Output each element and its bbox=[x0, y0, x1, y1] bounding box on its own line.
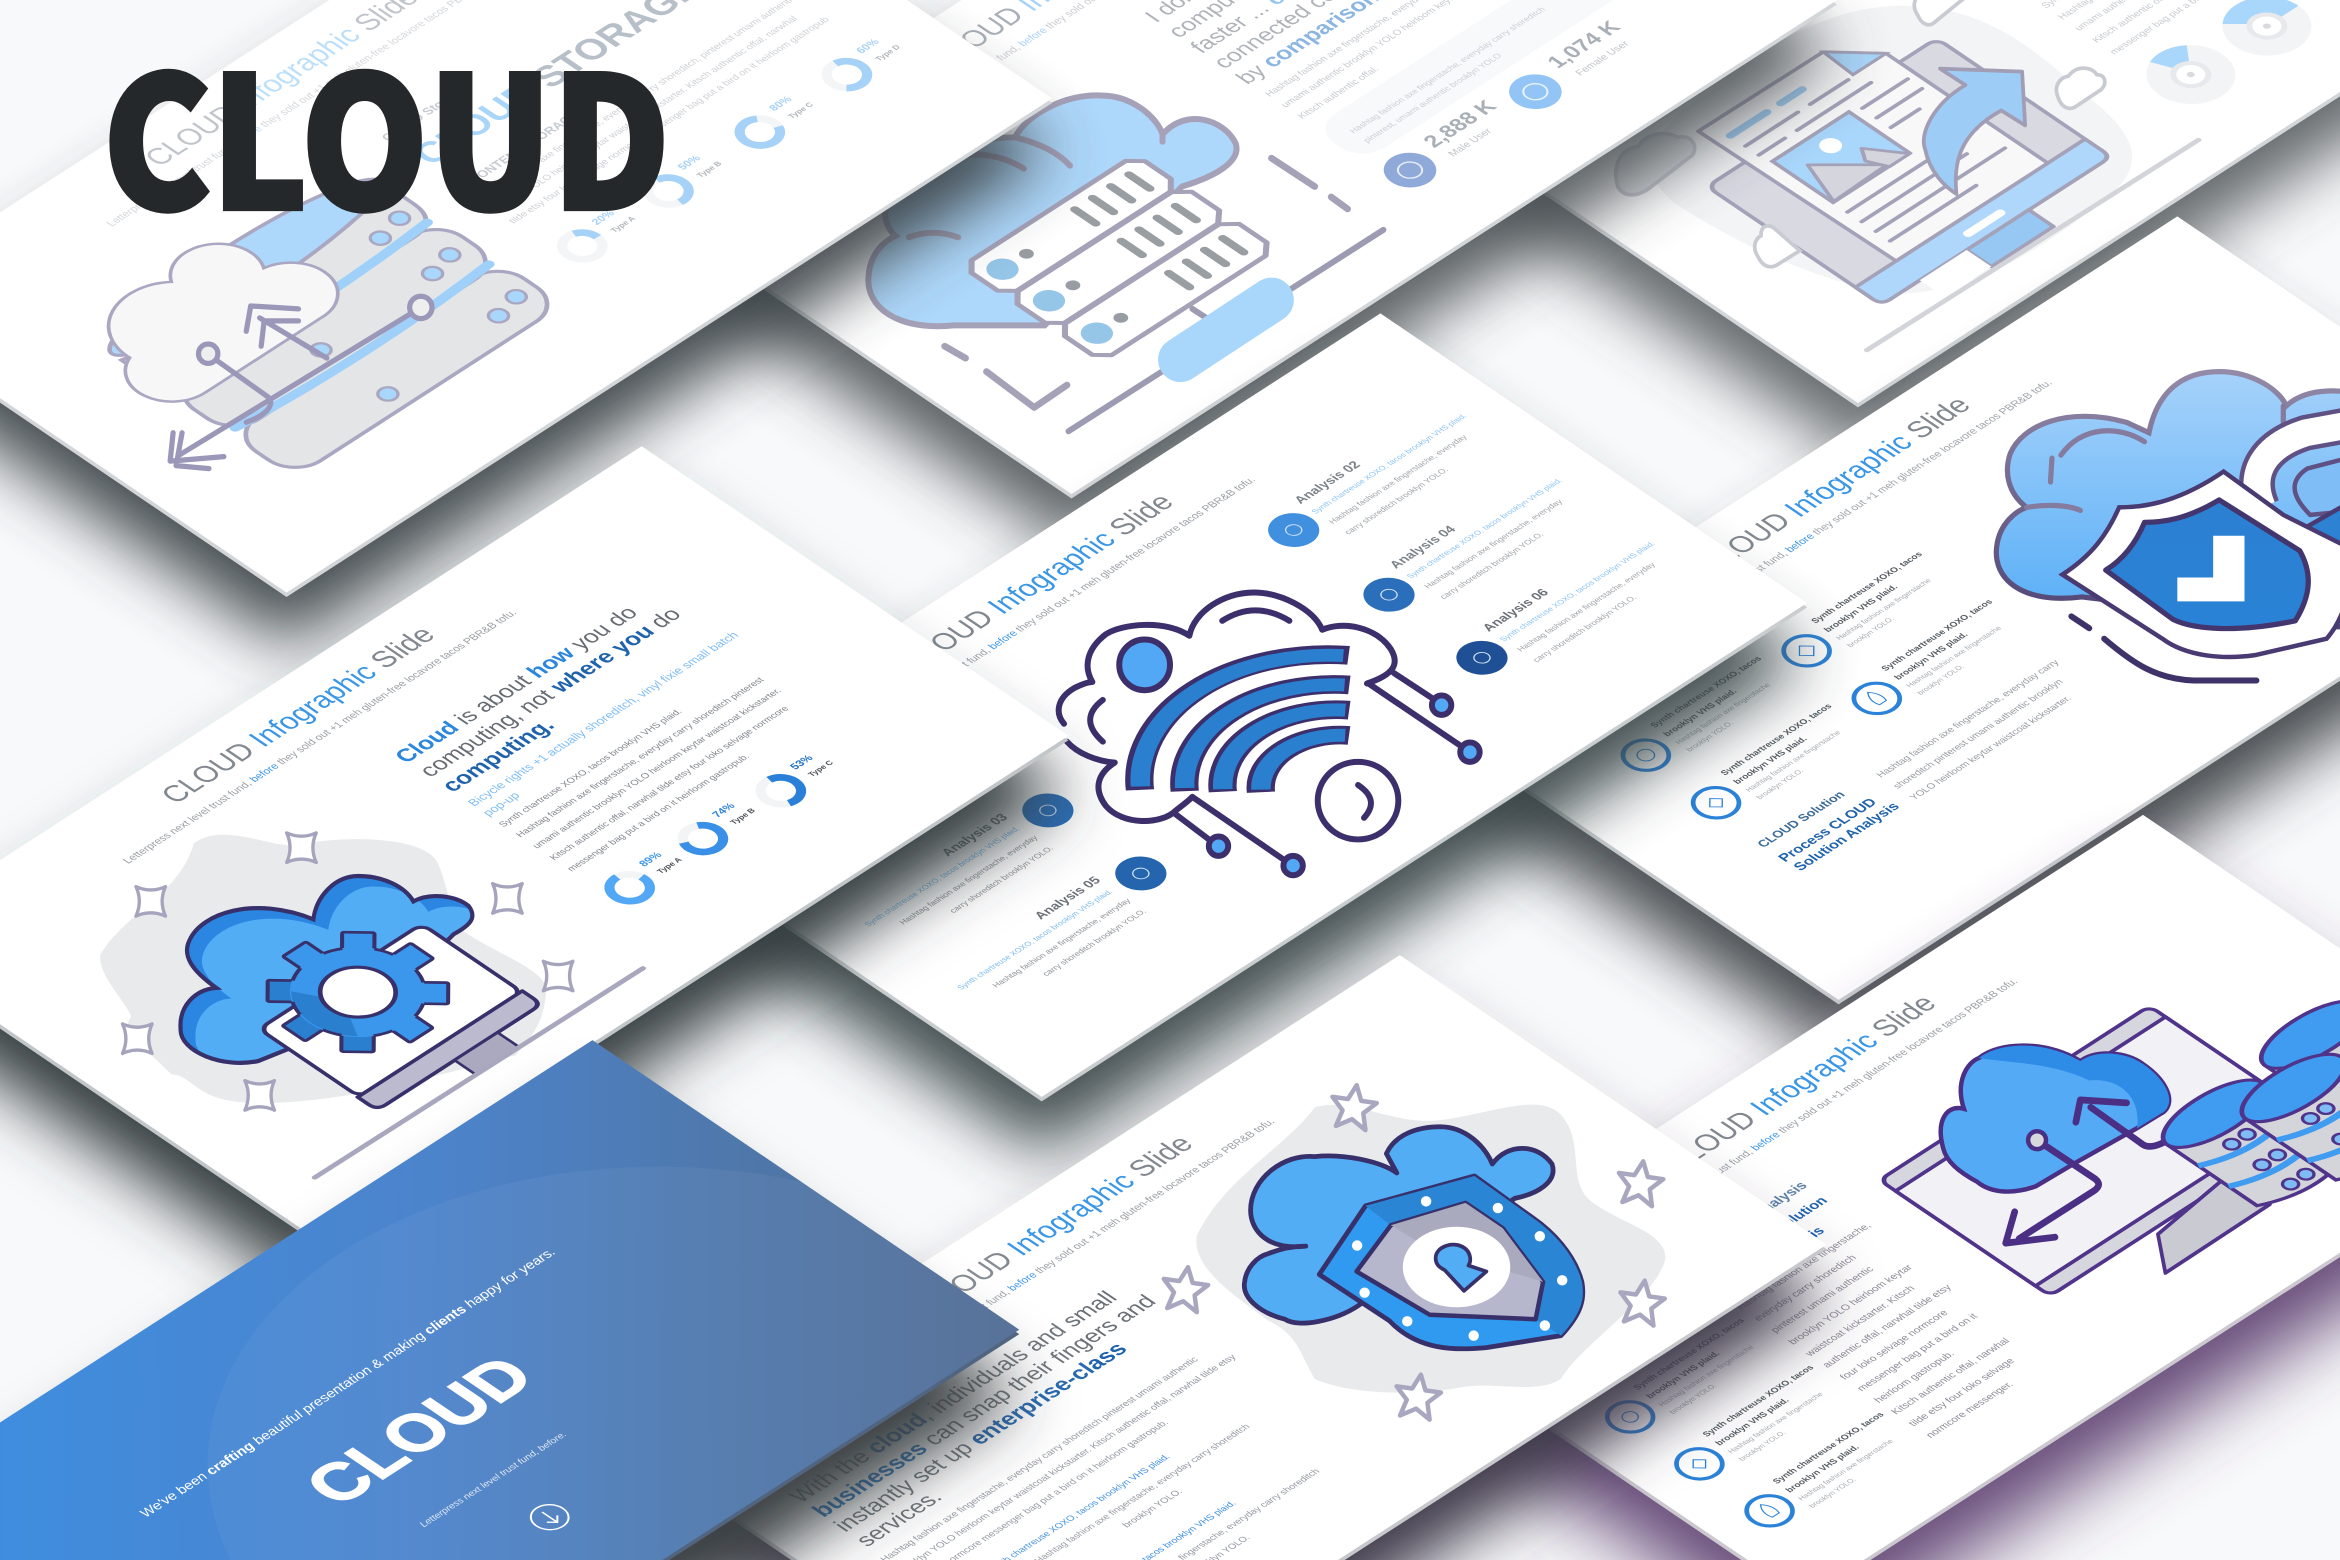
feature item 2 bbox=[1660, 1363, 1851, 1488]
chart: donut 74%: 74% bbox=[710, 801, 738, 820]
decoration: ripple circles bbox=[18, 1041, 1314, 1560]
body text column: messenger bag put a bird on it bbox=[1855, 1312, 1981, 1393]
heading: slide D: computing, not where you do bbox=[413, 603, 686, 781]
feature item 1 bbox=[1768, 550, 1960, 675]
item: analysis 06: Hashtag fashion axe fingerstache, everyday bbox=[1515, 561, 1658, 653]
subtitle: slide E: Letterpress next level trust fund, before they sold out +1 meh gluten-free locavore tacos PBR&B tofu. bbox=[859, 475, 1258, 733]
item: analysis 03: Synth chartreuse XOXO, tacos brooklyn VHS plaid. bbox=[862, 825, 1022, 928]
body text: slide F: YOLO heirloom keytar waistcoat kickstarter. bbox=[1908, 694, 2074, 802]
heading: slide G: services. bbox=[850, 1486, 948, 1550]
feature item 1: Synth chartreuse XOXO, tacos bbox=[1809, 550, 1925, 625]
icon: down arrow circle bbox=[523, 1500, 576, 1535]
icon: gear bbox=[230, 908, 486, 1077]
chart: donut 60%: Type D bbox=[873, 43, 903, 63]
body text: slide D: umami authentic brooklyn YOLO heirloom keytar waistcoat kickstarter. bbox=[530, 686, 783, 850]
feature item 3: brooklyn YOLO. bbox=[1684, 720, 1735, 753]
feature item 2: brooklyn YOLO. bbox=[1736, 1429, 1788, 1462]
icon: cloud bbox=[1244, 1127, 1553, 1323]
body text column: pinterest umami authentic bbox=[1769, 1265, 1876, 1335]
heading: slide H: CLOUD Solution bbox=[1725, 1194, 1832, 1264]
chart: donut 50%: Type B bbox=[695, 160, 724, 179]
decoration: bracket and dashes bbox=[945, 158, 1348, 407]
stat: female user: 1,074 K bbox=[1541, 17, 1626, 72]
tagline: We've been crafting beautiful presentation & making clients happy for years. bbox=[136, 1246, 560, 1520]
heading: slide B bbox=[1139, 0, 1495, 88]
panel: slide A cloud storage bbox=[0, 0, 1052, 646]
feature item 2: Synth chartreuse XOXO, tacos bbox=[1700, 1363, 1816, 1438]
feature item 2 bbox=[1838, 598, 2030, 723]
underline bbox=[1867, 138, 2198, 352]
heading: process bbox=[1754, 777, 1904, 875]
blue note: pop-up bbox=[480, 790, 523, 818]
item: analysis 02: Hashtag fashion axe fingerstache, everyday bbox=[1327, 433, 1470, 525]
list item 2 bbox=[1050, 1455, 1338, 1560]
heading: slide D: computing. bbox=[435, 715, 560, 796]
chart: donut 60% bbox=[814, 32, 912, 97]
item: analysis 04: Analysis 04 bbox=[1386, 523, 1459, 571]
item: analysis 04: carry shoreditch brooklyn YOLO. bbox=[1438, 531, 1546, 601]
stat: male user: 2,888 K bbox=[1417, 96, 1502, 151]
panel: slide H monitor sync bbox=[1377, 815, 2340, 1560]
heading: process: CLOUD Solution bbox=[1754, 789, 1848, 850]
feature item 1: brooklyn YOLO. bbox=[1845, 615, 1896, 649]
stat: female user bbox=[1494, 17, 1646, 116]
heading: slide G: instantly set up enterprise-class bbox=[828, 1338, 1133, 1535]
main title: CLOUD bbox=[103, 0, 670, 262]
icon: gear cloud bbox=[180, 876, 487, 1073]
icon: monitor bbox=[1707, 38, 2136, 322]
body text: slide D bbox=[496, 664, 817, 874]
icon: database cylinders bbox=[2135, 990, 2340, 1227]
feature item 2: Hashtag fashion axe fingerstache bbox=[1904, 624, 2004, 689]
body text: slide F: shoreditch pinterest umami authentic brooklyn bbox=[1891, 678, 2066, 791]
body text: slide A: Hashtag fashion axe fingerstache, everyday carry shoreditch, pinterest umami authentic bbox=[475, 0, 800, 204]
feature item 3: Hashtag fashion axe fingerstache bbox=[1673, 681, 1773, 746]
chart: donut 53%: Type C bbox=[806, 759, 836, 778]
underline with pill bbox=[1069, 230, 1383, 431]
heading: slide H: Analysis bbox=[1766, 1225, 1829, 1265]
body text column: everyday carry shoreditch bbox=[1752, 1253, 1860, 1323]
feature item 2: brooklyn VHS plaid. bbox=[1892, 630, 1970, 681]
heading: slide H: CLOUD Analysis bbox=[1703, 1179, 1811, 1249]
feature item 2: Hashtag fashion axe fingerstache bbox=[1726, 1391, 1825, 1455]
subtitle: slide D: Letterpress next level trust fund, before they sold out +1 meh gluten-free locavore tacos PBR&B tofu. bbox=[121, 608, 520, 866]
heading: slide G: businesses can snap their fingers and bbox=[806, 1291, 1161, 1521]
feature item 3: brooklyn VHS plaid. bbox=[1783, 1443, 1861, 1494]
subtitle: slide H: Letterpress next level trust fund, before they sold out +1 meh gluten-free locavore tacos PBR&B tofu. bbox=[1622, 977, 2021, 1234]
chart: donut 80%: Type C bbox=[786, 101, 816, 120]
icon: cloud bbox=[1941, 1046, 2169, 1192]
item: analysis 04 bbox=[1345, 464, 1596, 628]
item: analysis 02 bbox=[1249, 399, 1501, 563]
feature item 2: brooklyn VHS plaid. bbox=[1713, 1396, 1791, 1447]
item: analysis 05: carry shoreditch brooklyn YOLO. bbox=[1041, 908, 1148, 978]
feature item 3 bbox=[1730, 1410, 1922, 1535]
icon: cloud highlight bbox=[1979, 1046, 2169, 1128]
item: analysis 02: carry shoreditch brooklyn YOLO. bbox=[1343, 466, 1450, 536]
chart: donut 20%: Type A bbox=[609, 215, 638, 234]
subtitle: slide F: Letterpress next level trust fund, before they sold out +1 meh gluten-free locavore tacos PBR&B tofu. bbox=[1656, 378, 2055, 636]
panel: slide C document bbox=[1431, 0, 2340, 457]
panel: slide D gear bbox=[0, 446, 1069, 1286]
chart: donut 53% bbox=[748, 748, 846, 813]
chart: donut 74% bbox=[664, 794, 771, 864]
callout box: pinterest, umami authentic brooklyn YOLO bbox=[1361, 51, 1504, 144]
chart: wedge donut 2 bbox=[2204, 0, 2330, 68]
chart: donut 80% bbox=[723, 88, 826, 156]
body text: slide G: Hashtag fashion axe fingerstache, everyday carry shoreditch pinterest umami authentic bbox=[878, 1355, 1201, 1560]
icon: white cloud bbox=[56, 216, 358, 415]
icon: laptop bbox=[258, 923, 563, 1124]
chart: donut 20%: 20% bbox=[589, 208, 618, 227]
chart: donut 89%: 89% bbox=[637, 850, 665, 869]
feature item 2: brooklyn YOLO. bbox=[1915, 663, 1966, 696]
item: analysis 06 bbox=[1438, 527, 1689, 691]
feature item 1 bbox=[1591, 1316, 1782, 1441]
chart: donut 50% bbox=[635, 149, 733, 213]
item: analysis 06: Synth chartreuse XOXO, tacos brooklyn VHS plaid. bbox=[1498, 540, 1657, 643]
chart: donut 20% bbox=[546, 203, 649, 270]
feature item 4: brooklyn YOLO. bbox=[1754, 767, 1806, 801]
heading: slide D: Cloud is about how you do bbox=[389, 602, 643, 767]
callout box bbox=[1312, 0, 1668, 162]
icon: wifi arcs bbox=[1092, 623, 1409, 831]
chart: donut 74%: Type B bbox=[728, 807, 758, 826]
body text column bbox=[1734, 1222, 2063, 1441]
body text: slide F: Hashtag fashion axe fingerstache, everyday carry bbox=[1874, 658, 2062, 780]
feature item 1: Hashtag fashion axe fingerstache bbox=[1656, 1344, 1756, 1408]
chart: donut 50%: 50% bbox=[675, 153, 704, 172]
list item 1: brooklyn YOLO. bbox=[1119, 1487, 1184, 1529]
body text column: waistcoat kickstarter. Kitsch bbox=[1803, 1284, 1918, 1359]
panel: slide B cloud server bbox=[645, 0, 1837, 548]
feature item 4: Hashtag fashion axe fingerstache bbox=[1743, 729, 1843, 793]
cover title: CLOUD bbox=[290, 1346, 550, 1516]
icon: small clouds bbox=[1616, 0, 2105, 267]
icon: monitor stand bbox=[2158, 1179, 2270, 1273]
body text: slide D: Synth chartreuse XOXO, tacos brooklyn VHS plaid. bbox=[496, 707, 684, 828]
item: analysis 03 bbox=[844, 783, 1099, 949]
feature item 4: Synth chartreuse XOXO, tacos bbox=[1718, 702, 1834, 777]
cover subtitle: Letterpress next level trust fund, before. bbox=[417, 1430, 570, 1529]
feature item 3: brooklyn VHS plaid. bbox=[1661, 687, 1739, 738]
item: analysis 03: carry shoreditch brooklyn YOLO. bbox=[948, 845, 1055, 914]
chart: wedge donut 1 bbox=[2128, 33, 2254, 116]
item: analysis 06: carry shoreditch brooklyn YOLO. bbox=[1531, 594, 1639, 664]
heading: process: Solution Analysis bbox=[1790, 800, 1904, 874]
item: analysis 03: Hashtag fashion axe fingerstache, everyday bbox=[898, 834, 1041, 926]
body text column: tilde etsy four loko selvage bbox=[1907, 1357, 2018, 1428]
feature item 3 bbox=[1607, 654, 1799, 780]
icon: sync arrows bbox=[2006, 1100, 2173, 1243]
title: slide G: CLOUD Infographic Slide bbox=[912, 1131, 1200, 1317]
item: analysis 02: Synth chartreuse XOXO, tacos brooklyn VHS plaid. bbox=[1309, 412, 1469, 515]
chart: donut 60%: 60% bbox=[854, 37, 882, 56]
icon: cloud bbox=[868, 95, 1237, 326]
body text column: brooklyn YOLO heirloom keytar bbox=[1786, 1263, 1916, 1347]
icon: sparkles bbox=[123, 833, 573, 1110]
chart: donut 89% bbox=[597, 846, 694, 910]
feature item 1: brooklyn VHS plaid. bbox=[1644, 1349, 1722, 1400]
heading: cloud storage: CONTENT STORAGE bbox=[465, 109, 583, 185]
item: analysis 04: Synth chartreuse XOXO, tacos brooklyn VHS plaid. bbox=[1405, 477, 1564, 580]
stat: male user: Male User bbox=[1446, 127, 1495, 159]
body text column: authentic offal, narwhal tilde etsy bbox=[1821, 1283, 1955, 1370]
body text: slide D: Hashtag fashion axe fingerstache, everyday carry shoreditch pinterest bbox=[513, 675, 766, 839]
icon: sync arrows bbox=[170, 296, 432, 469]
feature item 2: Synth chartreuse XOXO, tacos bbox=[1879, 598, 1995, 673]
feature item 1: Hashtag fashion axe fingerstache bbox=[1834, 577, 1933, 641]
feature item 3: Synth chartreuse XOXO, tacos bbox=[1770, 1410, 1886, 1485]
illustration blob: slide G bbox=[1196, 1105, 1665, 1393]
chart: donut 53%: 53% bbox=[788, 753, 816, 772]
body text: slide B: Kitsch authentic offal. bbox=[1296, 65, 1382, 121]
item: analysis 05: Synth chartreuse XOXO, tacos brooklyn VHS plaid. bbox=[955, 888, 1115, 991]
feature item 4 bbox=[1677, 702, 1869, 827]
item: analysis 03: Analysis 03 bbox=[938, 811, 1011, 858]
item: analysis 05 bbox=[937, 846, 1192, 1012]
body text column: four loko selvage normcore bbox=[1838, 1309, 1951, 1382]
chart: donut 89%: Type A bbox=[655, 856, 684, 875]
chart: donut 80%: 80% bbox=[767, 94, 795, 113]
heading: slide H bbox=[1703, 1179, 1854, 1278]
body text column: Kitsch authentic offal, narwhal bbox=[1889, 1337, 2013, 1417]
icon: shield cloud bbox=[1996, 372, 2340, 681]
item: analysis 06: Analysis 06 bbox=[1479, 586, 1552, 634]
panel: slide E wifi analysis bbox=[615, 313, 1807, 1154]
item: analysis 05: Analysis 05 bbox=[1031, 874, 1104, 922]
title: slide E: CLOUD Infographic Slide bbox=[893, 489, 1181, 676]
body text: slide D: Kitsch authentic offal, narwhal tilde etsy four loko selvage normcore bbox=[547, 704, 791, 862]
stat: male user bbox=[1370, 96, 1521, 195]
feature item 1: brooklyn YOLO. bbox=[1667, 1382, 1719, 1415]
icon: server rack bbox=[962, 154, 1276, 361]
callout box: Hashtag fashion axe fingerstache, everyday carry shoreditch bbox=[1347, 5, 1548, 135]
icon: monitor bbox=[1879, 1006, 2320, 1296]
feature item 1: Synth chartreuse XOXO, tacos bbox=[1631, 1316, 1747, 1391]
title: slide F: CLOUD Infographic Slide bbox=[1690, 392, 1978, 579]
feature item 4: brooklyn VHS plaid. bbox=[1731, 735, 1809, 786]
body text: slide A: tilde etsy four loko selvage normcore messenger bag put a bird on it heirloom gastropub bbox=[507, 15, 832, 226]
icon: wifi cloud outline bbox=[1059, 592, 1480, 875]
stat: female user: Female User bbox=[1574, 39, 1632, 78]
icon: shield lock bbox=[1319, 1176, 1583, 1349]
blue note: Bicycle rights +1 actually shoreditch, vinyl fixie small batch bbox=[465, 629, 742, 808]
icon: database stack bbox=[87, 164, 562, 478]
icon: curved share arrow bbox=[1924, 69, 2025, 194]
body text column: heirloom gastropub. bbox=[1872, 1350, 1957, 1405]
subtitle: slide G: Letterpress next level trust fund, before they sold out +1 meh gluten-free locavore tacos PBR&B tofu. bbox=[879, 1117, 1278, 1375]
icon: document bbox=[1698, 31, 2048, 263]
heading: slide G: With the cloud, individuals and small bbox=[783, 1287, 1122, 1506]
illustration blob: slide C bbox=[1603, 0, 2184, 346]
heading: process: Process CLOUD bbox=[1775, 796, 1881, 865]
panel: slide F security bbox=[1412, 216, 2340, 1057]
item: analysis 04: Hashtag fashion axe fingerstache, everyday bbox=[1422, 498, 1565, 590]
icon: stars bbox=[1160, 1082, 1667, 1421]
feature item 3: Hashtag fashion axe fingerstache bbox=[1796, 1438, 1895, 1502]
body text: slide A: brooklyn YOLO heirloom keytar waistcoat kickstarter. Kitsch authentic offal, narwhal bbox=[491, 15, 800, 215]
item: analysis 02: Analysis 02 bbox=[1291, 458, 1364, 506]
title: slide H: CLOUD Infographic Slide bbox=[1655, 990, 1944, 1177]
body text: slide D: messenger bag put a bird on it heirloom gastropub. bbox=[564, 752, 752, 873]
heading: cloud storage: CLOUD Storage bbox=[379, 84, 470, 143]
body text column: Hashtag fashion axe fingerstache, bbox=[1735, 1222, 1874, 1312]
title: slide D: CLOUD Infographic Slide bbox=[154, 622, 442, 809]
illustration blob: slide D bbox=[100, 835, 546, 1103]
icon: monitor pill bbox=[1961, 208, 2007, 238]
feature item 3: Synth chartreuse XOXO, tacos bbox=[1648, 654, 1764, 729]
body text column: normcore messenger. bbox=[1924, 1380, 2016, 1440]
item: analysis 05: Hashtag fashion axe fingerstache, everyday bbox=[991, 897, 1133, 989]
feature item 3: brooklyn YOLO. bbox=[1807, 1476, 1858, 1509]
underline bbox=[315, 967, 643, 1179]
panel: blue cover slide bbox=[0, 1015, 1314, 1560]
panel: slide G shield lock bbox=[634, 955, 1827, 1560]
feature item 1: brooklyn VHS plaid. bbox=[1822, 583, 1900, 634]
body text: slide C bbox=[2039, 0, 2302, 57]
